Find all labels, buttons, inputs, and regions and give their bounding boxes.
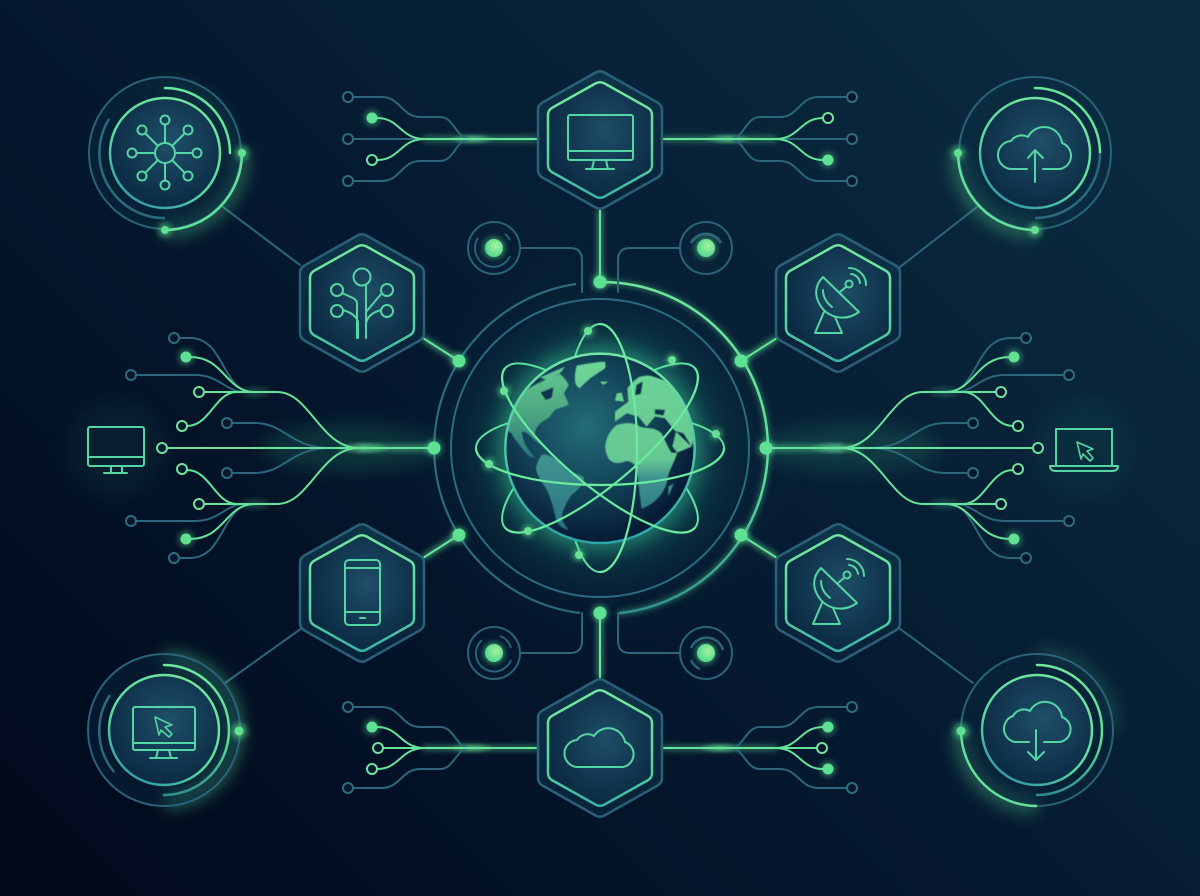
icon: cloud with up arrow <box>998 127 1071 182</box>
badge: cloud download (bottom right) <box>953 654 1113 806</box>
outer ring left dim arc <box>434 284 580 613</box>
connector lines: dim links to corner badges <box>223 207 977 683</box>
hexagon: cloud (bottom) <box>538 679 662 817</box>
icon: smartphone <box>345 560 380 625</box>
icon: cloud <box>564 728 634 767</box>
icon: circuit tree <box>331 268 393 338</box>
hexagon: satellite dish (lower right) <box>776 524 900 662</box>
hub junction nodes <box>426 274 774 621</box>
small pulse node: top right <box>618 222 732 292</box>
icon: monitor <box>568 115 633 169</box>
central hub with rings and globe <box>433 276 774 619</box>
icon: radial network <box>128 116 202 190</box>
icon: cloud with down arrow <box>1004 702 1071 760</box>
icon: satellite dish <box>813 559 864 624</box>
branching circuit: left middle <box>126 333 440 563</box>
small pulse node: bottom left <box>468 613 582 679</box>
badge: network hub (top left) <box>89 77 249 237</box>
badge: monitor with cursor (bottom left) <box>88 654 247 806</box>
branching circuit: top right <box>662 92 857 186</box>
hexagon: satellite dish (upper right) <box>776 234 900 372</box>
icon: laptop with cursor (right) <box>1034 398 1134 498</box>
outer ring right green arc <box>600 282 768 613</box>
hexagon: tree network (upper left) <box>300 234 424 372</box>
small pulse node: top left <box>468 222 582 292</box>
globe <box>498 346 702 550</box>
branching circuit: top left <box>343 92 538 186</box>
orbit dots <box>483 325 722 561</box>
continents <box>505 362 695 530</box>
hexagon: smartphone (lower left) <box>300 524 424 662</box>
orbits in front of the globe <box>476 324 724 572</box>
inner ring <box>451 299 749 597</box>
branching circuit: right middle <box>760 333 1074 563</box>
hexagon: monitor (top) <box>538 71 662 209</box>
small pulse node: bottom right <box>618 613 732 679</box>
orbits behind the globe <box>476 324 724 572</box>
green spokes from hub to hexagons <box>359 210 841 678</box>
branching circuit: bottom left <box>343 702 538 793</box>
icon: desktop monitor (left) <box>66 398 166 498</box>
icon: monitor and cursor <box>133 707 195 758</box>
badge: cloud upload (top right) <box>951 77 1111 237</box>
branching circuit: bottom right <box>662 702 857 793</box>
icon: satellite dish <box>815 268 866 333</box>
hub glow <box>400 248 800 648</box>
